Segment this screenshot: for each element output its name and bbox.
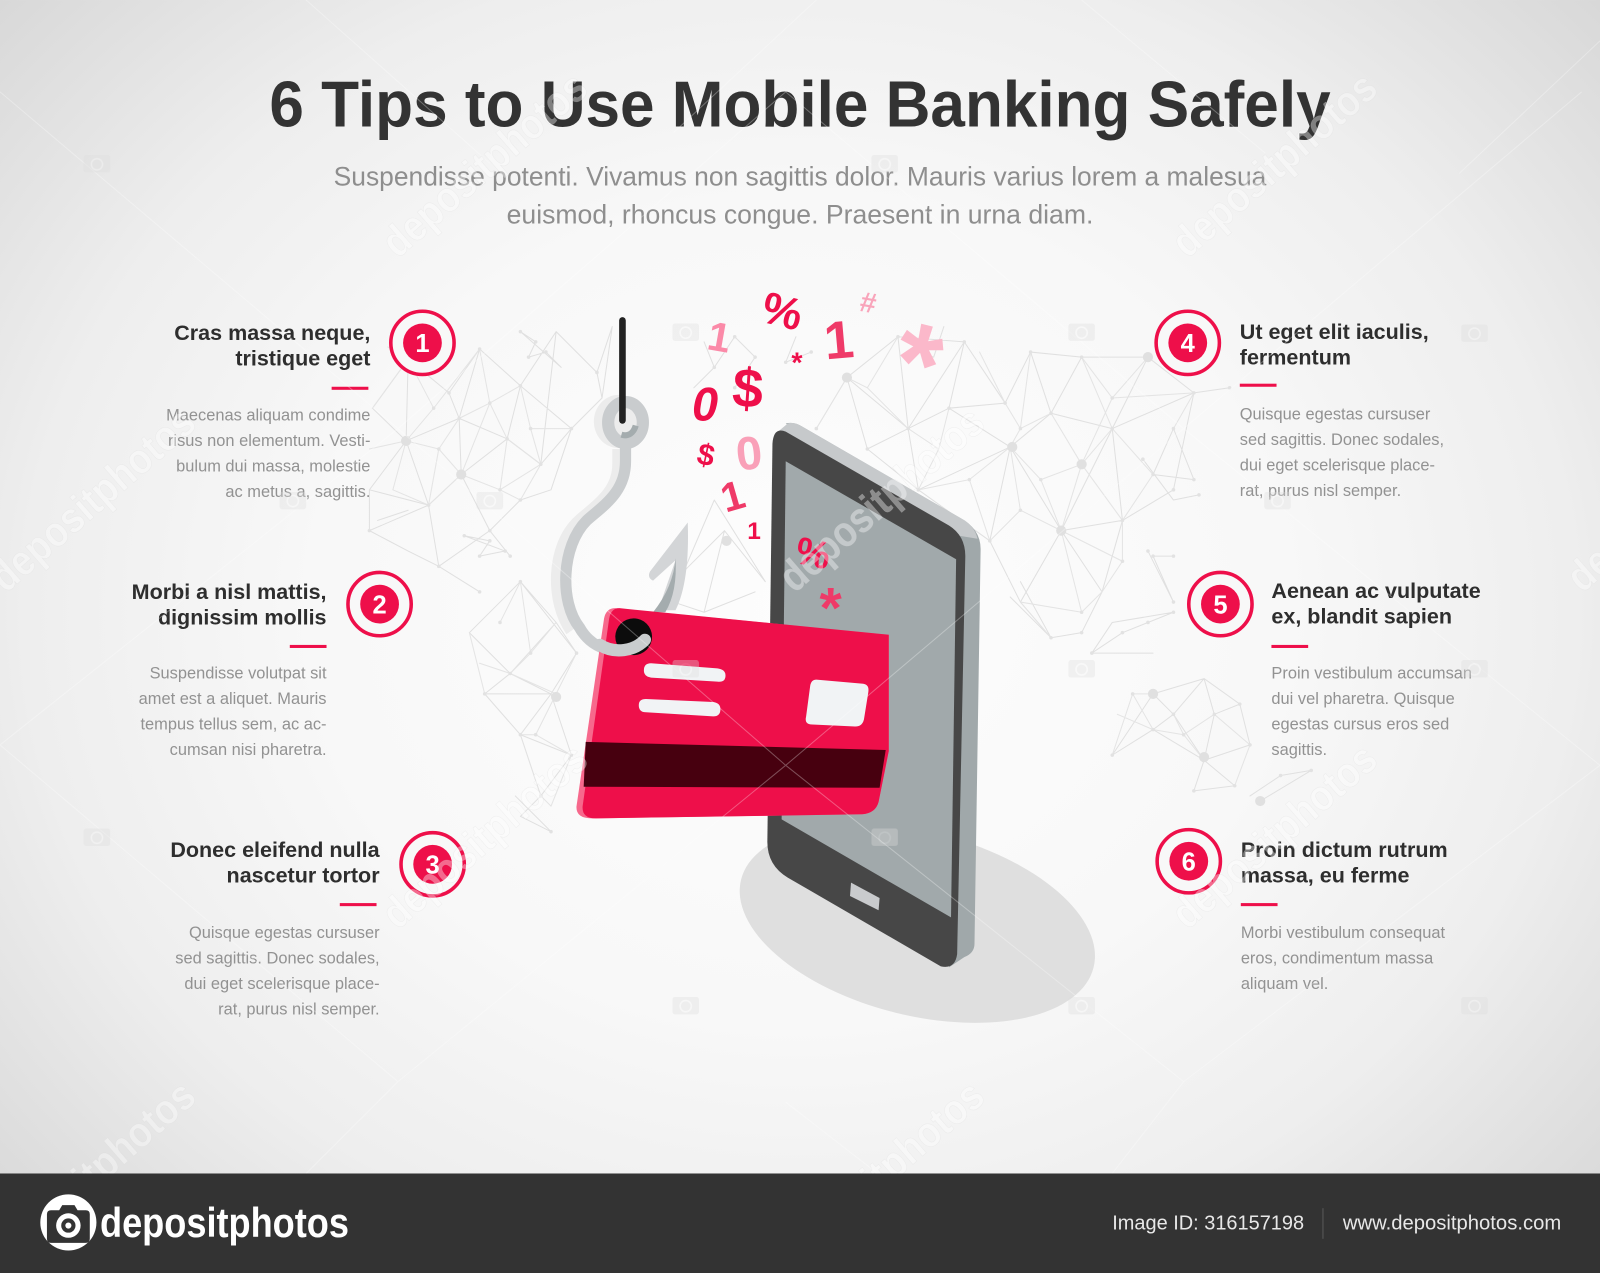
flying characters: $ (730, 356, 765, 420)
tip 5: dui vel pharetra. Quisque (1271, 690, 1455, 708)
tip 4: Quisque egestas cursuser (1240, 405, 1431, 423)
footer bar: www.depositphotos.com (1342, 1213, 1561, 1235)
watermark: depositphotos (1162, 735, 1386, 938)
tip 4: rat, purus nisl semper. (1240, 482, 1401, 500)
tip 5: 5 (1213, 591, 1228, 619)
tip 5: ex, blandit sapien (1271, 604, 1452, 628)
fish hook (557, 395, 688, 651)
footer bar: Image ID: 316157198 (1112, 1213, 1304, 1235)
flying characters: 1 (715, 471, 750, 521)
tip 4: 4 (1181, 330, 1196, 358)
flying characters: 0 (733, 426, 765, 481)
tip 2: Suspendisse volutpat sit (150, 665, 327, 683)
tip 4 (1156, 311, 1444, 500)
subtitle: euismod, rhoncus congue. Praesent in urna diam. (507, 199, 1093, 229)
footer bar (0, 1173, 1600, 1273)
tip 3: dui eget scelerisque place- (184, 975, 380, 993)
tip 2 (132, 572, 411, 759)
subtitle: Suspendisse potenti. Vivamus non sagittis dolor. Mauris varius lorem a malesua (334, 162, 1267, 192)
tip 1: Maecenas aliquam condime (166, 406, 370, 424)
tip 2: amet est a aliquet. Mauris (139, 690, 327, 708)
footer logo: depositphotos (100, 1199, 349, 1246)
flying characters: 0 (692, 378, 718, 430)
subtitle (334, 162, 1267, 229)
flying characters: % (792, 529, 834, 578)
tip 3 (170, 833, 464, 1018)
tip 6: aliquam vel. (1241, 975, 1328, 993)
world network map (369, 327, 1311, 832)
tip 4: dui eget scelerisque place- (1240, 456, 1435, 474)
flying characters: $ (694, 437, 718, 474)
tip 6: 6 (1182, 848, 1196, 876)
flying characters: * (880, 297, 955, 431)
flying characters: 1 (822, 310, 856, 371)
tip 1 (166, 311, 454, 501)
flying characters: * (791, 347, 803, 379)
tip 4: fermentum (1240, 345, 1351, 369)
fishing line (619, 320, 626, 420)
flying characters: % (757, 281, 808, 341)
tip 3: Quisque egestas cursuser (189, 924, 380, 942)
tip 5: Proin vestibulum accumsan (1271, 665, 1472, 683)
tip 1: risus non elementum. Vesti- (168, 432, 370, 450)
tip 4: sed sagittis. Donec sodales, (1240, 431, 1444, 449)
footer logo (40, 1194, 349, 1251)
tip 3: nascetur tortor (227, 864, 380, 888)
flying characters: * (819, 577, 842, 641)
tip 5: sagittis. (1271, 741, 1327, 759)
tip 3: 3 (426, 851, 440, 879)
tip 1: 1 (415, 330, 430, 358)
watermark: depositphotos (373, 735, 597, 938)
tip 2: tempus tellus sem, ac ac- (141, 716, 327, 734)
tip 2: Morbi a nisl mattis, (132, 580, 327, 604)
tip 1: tristique eget (235, 346, 370, 370)
watermark: depositphotos (373, 63, 597, 267)
tip 4: Ut eget elit iaculis, (1240, 320, 1429, 344)
tip 6: Proin dictum rutrum (1241, 838, 1448, 862)
watermark: depositphotos (770, 398, 994, 601)
watermark: depositphotos (1162, 63, 1386, 267)
tip 3: Donec eleifend nulla (170, 838, 381, 862)
tip 6: massa, eu ferme (1241, 864, 1409, 888)
tip 6 (1157, 830, 1448, 993)
flying characters: 1 (747, 518, 761, 545)
credit card (576, 608, 889, 818)
flying characters: 1 (704, 312, 735, 362)
tip 2: 2 (372, 591, 387, 619)
tip 3: rat, purus nisl semper. (218, 1000, 380, 1018)
tip 1: Cras massa neque, (174, 321, 370, 345)
tip 2: cumsan nisi pharetra. (170, 741, 327, 759)
tip 5: Aenean ac vulputate (1271, 579, 1481, 603)
tip 5 (1189, 572, 1481, 759)
phone shadow (719, 790, 1116, 1057)
tip 6: eros, condimentum massa (1241, 949, 1434, 967)
title: 6 Tips to Use Mobile Banking Safely (269, 68, 1331, 141)
tip 5: egestas cursus eros sed (1271, 716, 1449, 734)
tip 1: bulum dui massa, molestie (176, 457, 370, 475)
tip 2: dignissim mollis (158, 606, 327, 630)
smartphone (767, 423, 981, 967)
flying characters: # (858, 286, 879, 320)
watermark: depositphotos (770, 1071, 994, 1273)
tip 3: sed sagittis. Donec sodales, (175, 949, 380, 967)
tip 1: ac metus a, sagittis. (225, 483, 370, 501)
tip 6: Morbi vestibulum consequat (1241, 924, 1446, 942)
flying characters (692, 281, 955, 641)
